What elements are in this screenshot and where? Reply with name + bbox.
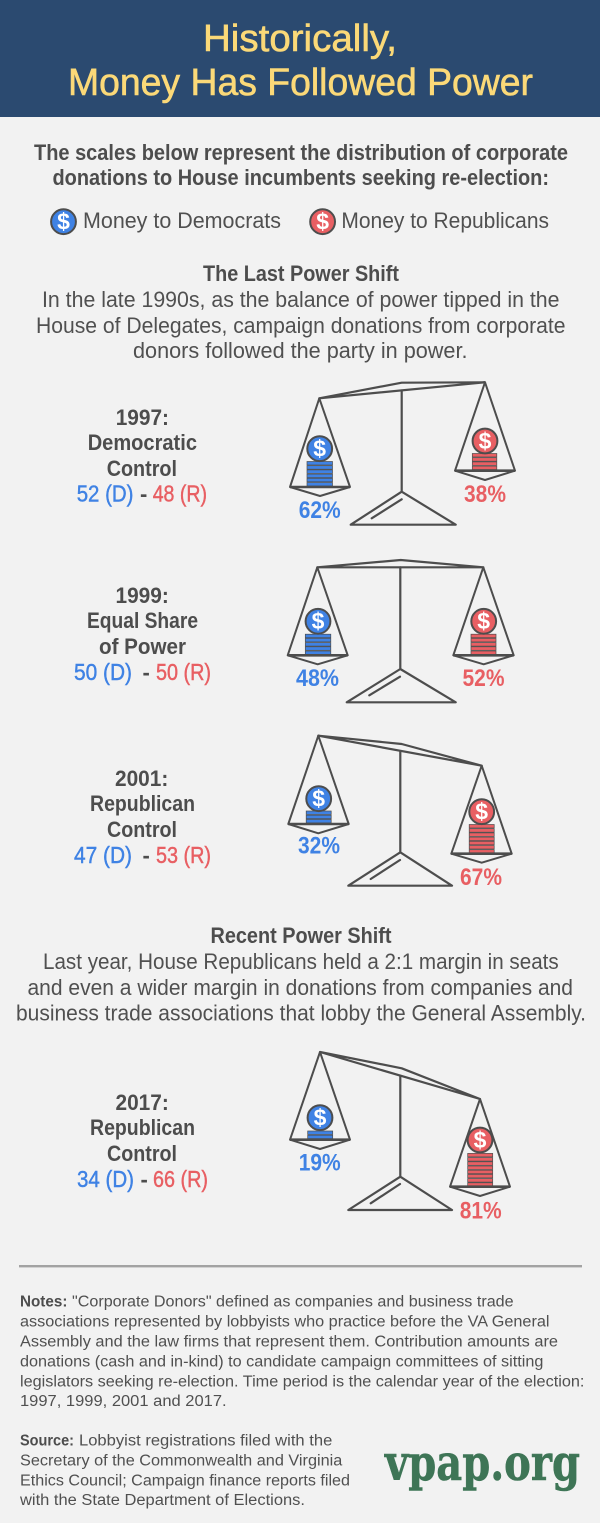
left pan: 62 percent xyxy=(290,398,350,496)
header banner xyxy=(0,0,600,117)
source text: with the State Department of Elections. xyxy=(19,1492,305,1509)
notes text: 1997, 1999, 2001 and 2017. xyxy=(20,1393,227,1410)
label: 1999: of Power xyxy=(99,634,186,659)
intro text xyxy=(34,140,568,190)
value: 19%: 19% xyxy=(299,1150,341,1177)
source text: Source: xyxy=(20,1432,74,1449)
label: 1997: 48 (R) xyxy=(153,481,207,507)
description: House of Delegates, campaign donations from corporate xyxy=(36,313,566,338)
label: 2001: 53 (R) xyxy=(156,842,211,868)
left pan: 62 percent: $ xyxy=(313,436,326,462)
right pan: 81 percent xyxy=(450,1099,510,1196)
source text xyxy=(19,1432,350,1509)
source text: Lobbyist registrations filed with the xyxy=(79,1432,332,1449)
value: 32%: 32% xyxy=(298,833,340,860)
heading: Recent Power Shift xyxy=(210,923,392,948)
notes text: Assembly and the law firms that represent them. Contribution amounts are xyxy=(20,1334,558,1351)
label: 1997 xyxy=(77,405,207,507)
legend xyxy=(51,208,549,234)
right pan: 81 percent: $ xyxy=(474,1127,487,1153)
section: the last power shift xyxy=(36,261,566,363)
description: donors followed the party in power. xyxy=(133,338,468,363)
notes text: Notes: xyxy=(20,1294,67,1311)
legend label: republicans: Money to Republicans xyxy=(341,208,549,233)
icon: red dollar coin: $ xyxy=(316,208,329,234)
label: 1999: - xyxy=(142,660,150,685)
icon: blue dollar coin xyxy=(51,208,76,234)
right pan: 67 percent: $ xyxy=(475,798,488,824)
label: 2017 xyxy=(77,1090,208,1192)
label: 2017: 34 (D) xyxy=(77,1166,134,1192)
description: Last year, House Republicans held a 2:1 margin in seats xyxy=(43,949,559,974)
left pan: 32 percent: $ xyxy=(312,786,325,812)
notes text: associations represented by lobbyists who practice before the VA General xyxy=(20,1314,550,1331)
label: 1999: 50 (R) xyxy=(156,659,211,685)
scale: 1999 xyxy=(288,560,514,702)
value: 52%: 52% xyxy=(462,665,504,692)
notes text: legislators seeking re-election. Time period is the calendar year of the election: xyxy=(20,1374,584,1391)
value: 67%: 67% xyxy=(460,864,502,891)
icon: blue dollar coin: $ xyxy=(57,208,70,234)
left pan: 19 percent: $ xyxy=(314,1104,327,1130)
label: 1999: Equal Share xyxy=(87,608,198,633)
label: 2001 xyxy=(74,766,211,868)
scale: 1997 xyxy=(290,382,515,525)
value: 81%: 81% xyxy=(460,1197,502,1224)
source text: Ethics Council; Campaign finance reports filed xyxy=(20,1472,350,1489)
label: 2001: - xyxy=(142,843,150,868)
label: 2001: Control xyxy=(107,817,177,842)
left pan: 19 percent xyxy=(290,1052,350,1149)
label: 1997: - xyxy=(140,482,147,507)
value: 48%: 48% xyxy=(296,665,339,692)
label: 1999 xyxy=(74,583,211,685)
description xyxy=(16,949,586,1026)
value: 38%: 38% xyxy=(464,481,506,508)
label: 2001: 2001: xyxy=(115,766,168,791)
label: 2017: 66 (R) xyxy=(153,1166,208,1192)
notes text: "Corporate Donors" defined as companies and business trade xyxy=(72,1294,514,1311)
label: 2001: 47 (D) xyxy=(74,842,132,868)
label: 2017: 2017: xyxy=(116,1090,169,1115)
notes text: donations (cash and in-kind) to candidate campaign committees of sitting xyxy=(20,1354,543,1371)
label: 1997: Democratic xyxy=(88,430,197,455)
notes text xyxy=(20,1294,584,1410)
label: 2017: Control xyxy=(107,1141,177,1166)
description xyxy=(36,287,566,363)
section: recent power shift xyxy=(16,923,586,1026)
value: 62%: 62% xyxy=(299,497,341,524)
left pan: 48 percent xyxy=(288,567,348,664)
right pan: 52 percent: $ xyxy=(477,608,490,634)
scale: 2017 xyxy=(290,1052,510,1224)
right pan: 38 percent: $ xyxy=(479,428,492,454)
title: Historically, xyxy=(203,18,397,60)
label: 2017: Republican xyxy=(90,1115,195,1140)
label: 2017: - xyxy=(140,1167,148,1192)
scale: 2001 xyxy=(288,736,512,891)
label: 2001: Republican xyxy=(90,791,195,816)
label: 1997: Control xyxy=(107,456,177,481)
label: 1999: 1999: xyxy=(116,583,169,608)
left pan: 48 percent: $ xyxy=(312,608,325,634)
right pan: 52 percent xyxy=(453,567,514,664)
heading: The Last Power Shift xyxy=(203,261,400,286)
title xyxy=(68,18,533,104)
left pan: 32 percent xyxy=(288,736,349,833)
source text: Secretary of the Commonwealth and Virginia xyxy=(20,1452,343,1469)
description: and even a wider margin in donations from companies and xyxy=(28,975,573,1000)
legend label: democrats: Money to Democrats xyxy=(83,208,281,233)
description: business trade associations that lobby the General Assembly. xyxy=(16,1001,586,1026)
description: In the late 1990s, as the balance of power tipped in the xyxy=(42,287,560,312)
label: 1999: 50 (D) xyxy=(74,659,132,685)
title: Money Has Followed Power xyxy=(68,62,533,104)
right pan: 38 percent xyxy=(455,382,515,480)
label: 1997: 1997: xyxy=(116,405,169,430)
intro text: donations to House incumbents seeking re-election: xyxy=(52,165,549,190)
label: 1997: 52 (D) xyxy=(77,481,134,507)
icon: red dollar coin xyxy=(310,208,335,234)
right pan: 67 percent xyxy=(451,766,512,863)
